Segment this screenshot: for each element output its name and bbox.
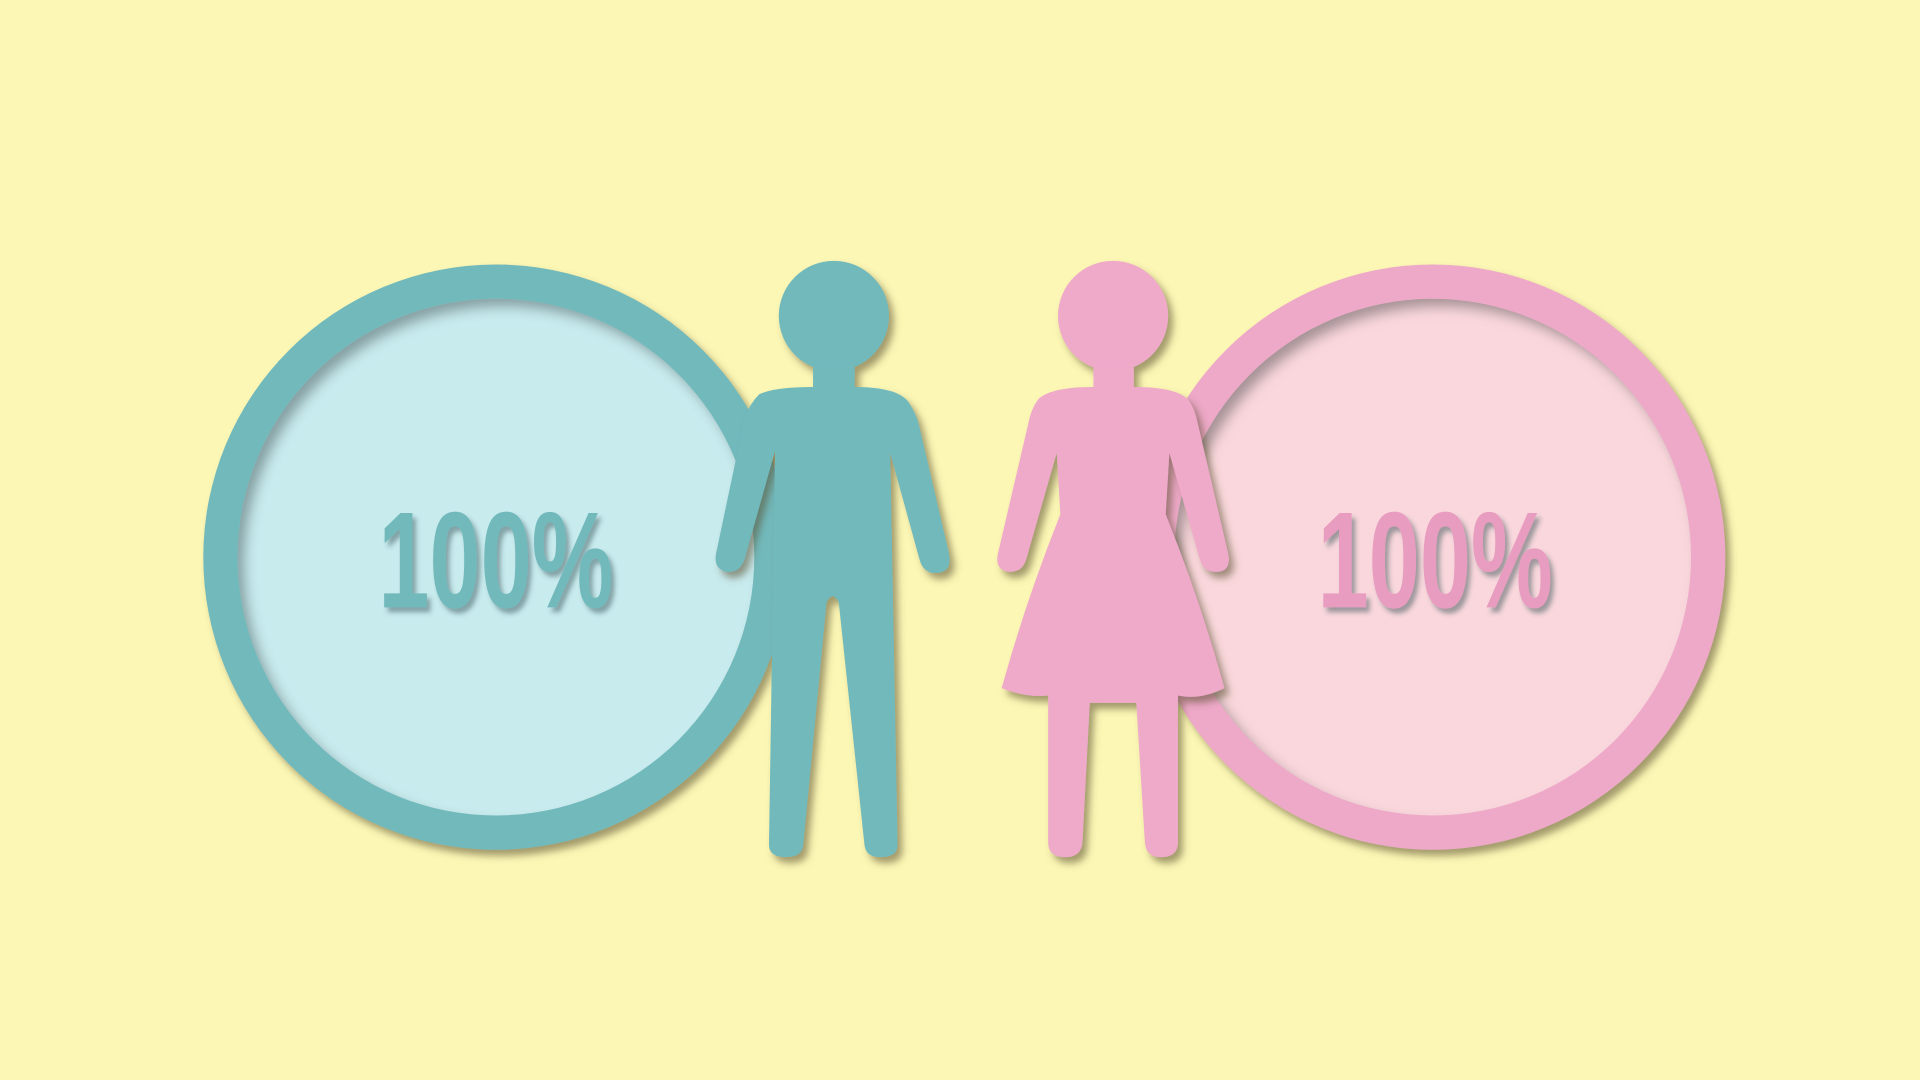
panel: male circle: [203, 264, 789, 850]
icon: woman figure: [997, 261, 1229, 857]
female percentage text: 100%: [1318, 484, 1553, 637]
male percentage text: 100%: [378, 484, 613, 637]
icon: man figure: [716, 261, 950, 857]
panel: female circle: [1140, 264, 1725, 850]
